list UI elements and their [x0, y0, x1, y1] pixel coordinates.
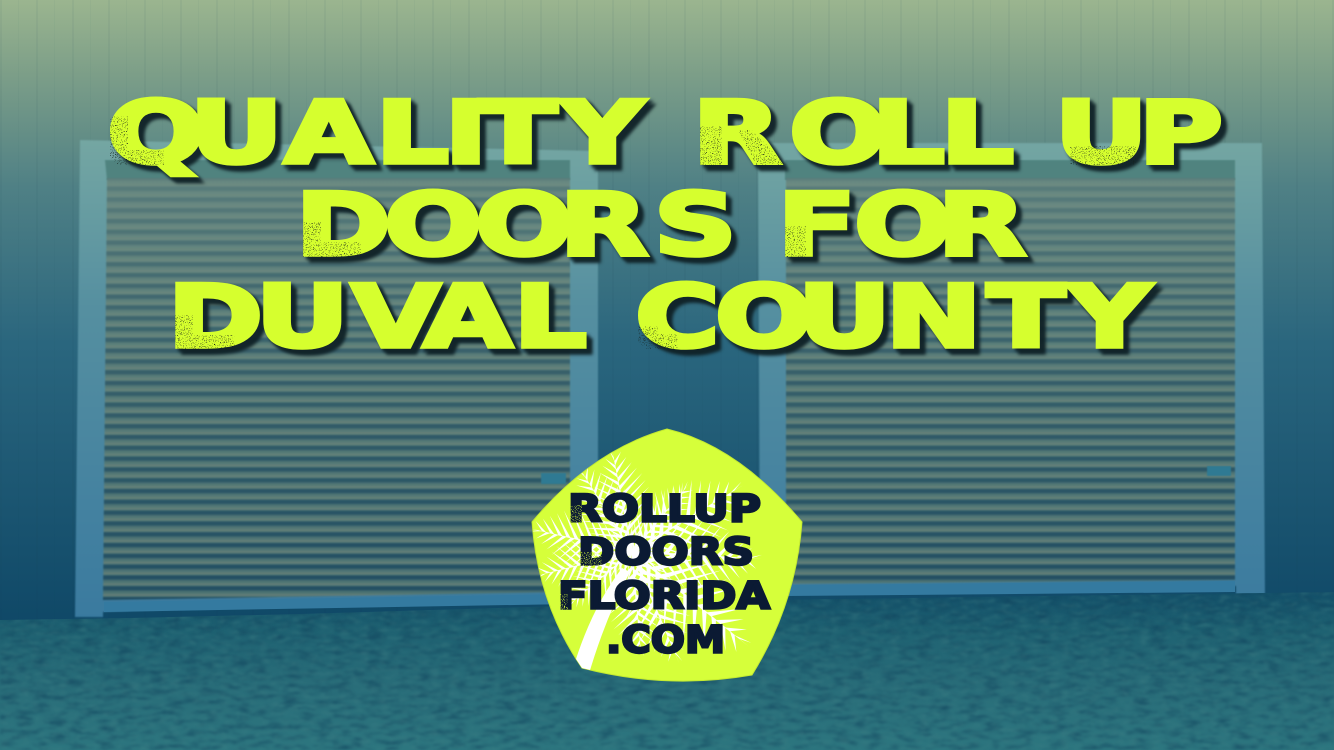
- fronds: [532, 452, 762, 662]
- door latch left: [541, 473, 566, 484]
- palm tree: [532, 452, 762, 670]
- title grunge texture: [110, 116, 1136, 349]
- badge shape: [532, 429, 802, 681]
- door sill right: [786, 581, 1235, 596]
- logo badge: [523, 429, 802, 684]
- title line 1: UP: [1055, 83, 1223, 183]
- door latch right: [1207, 466, 1231, 476]
- title: [107, 83, 1223, 367]
- door frame left: [75, 140, 598, 617]
- door recess left: [105, 160, 570, 180]
- door slats left: [103, 178, 570, 600]
- panel: right roll up door: [758, 143, 1265, 600]
- logo text: DOORS: [578, 531, 754, 574]
- door recess right: [785, 160, 1235, 180]
- title line 1: [107, 83, 1223, 183]
- grass foreground: [0, 590, 1334, 750]
- title line 3: [168, 267, 1153, 367]
- door frame right: [758, 143, 1265, 600]
- title line 2: DOORS: [296, 175, 736, 275]
- trunk: [576, 568, 630, 670]
- title line 3: COUNTY: [635, 267, 1153, 367]
- logo text: FLORIDA: [558, 575, 770, 618]
- title line 1: ROLL: [693, 83, 1014, 183]
- door slats right: [786, 178, 1235, 584]
- title line 2: FOR: [778, 175, 1026, 275]
- title line 2: [296, 175, 1026, 275]
- panel: left roll up door: [75, 140, 598, 617]
- logo text: .COM: [606, 619, 725, 662]
- title line 1: QUALITY: [107, 83, 646, 183]
- title line 3: DUVAL: [168, 267, 587, 367]
- door sill left: [104, 594, 570, 612]
- logo grunge texture: [560, 505, 602, 610]
- logo text: ROLLUP: [568, 488, 761, 531]
- logo text: [558, 488, 770, 662]
